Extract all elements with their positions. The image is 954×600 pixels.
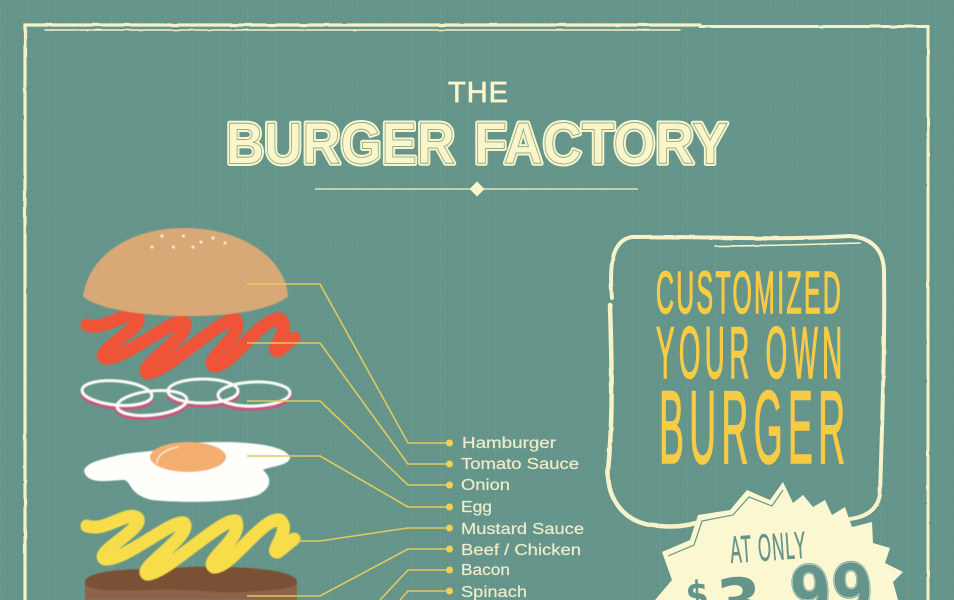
callout chalk frame — [608, 236, 884, 527]
label text: Hamburger — [462, 435, 556, 452]
label text: Mustard Sauce — [461, 521, 584, 538]
title: burger factory: FACTORY — [474, 112, 728, 176]
burger illustration — [81, 229, 297, 600]
ingredient: onion rings — [81, 378, 290, 422]
ingredient: tomato sauce — [87, 315, 294, 373]
price badge — [655, 482, 903, 600]
title — [226, 77, 728, 196]
callout headline: BURGER — [659, 369, 845, 486]
leader lines — [247, 284, 449, 600]
starburst — [655, 482, 903, 600]
callout headline: CUSTOMIZED — [656, 260, 841, 326]
callout headline: YOUR OWN — [656, 312, 842, 394]
ingredient: hamburger bun — [84, 229, 287, 315]
title divider with diamond — [315, 182, 638, 196]
label text — [461, 435, 584, 600]
title: the: THE — [448, 77, 508, 109]
leader end dots — [446, 440, 453, 594]
ingredient: fried egg — [84, 442, 290, 502]
ingredient labels with leader lines — [247, 284, 584, 600]
ingredient: mustard sauce — [87, 516, 294, 574]
label text: Tomato Sauce — [461, 456, 579, 473]
price — [684, 547, 876, 600]
label text: Onion — [461, 477, 510, 494]
title: burger factory: BURGER — [226, 112, 455, 176]
callout: customized your own burger — [608, 236, 884, 527]
label text: Egg — [461, 499, 492, 516]
at only: AT ONLY — [729, 524, 807, 572]
starburst offset outline — [668, 490, 783, 556]
title: burger factory: BURGER — [226, 112, 455, 176]
label text: Beef / Chicken — [461, 542, 581, 559]
title: burger factory — [226, 112, 728, 176]
callout headline — [656, 260, 845, 486]
title: burger factory: FACTORY — [474, 112, 728, 176]
label text: Bacon — [461, 562, 510, 579]
ingredient: beef patty — [85, 567, 297, 600]
